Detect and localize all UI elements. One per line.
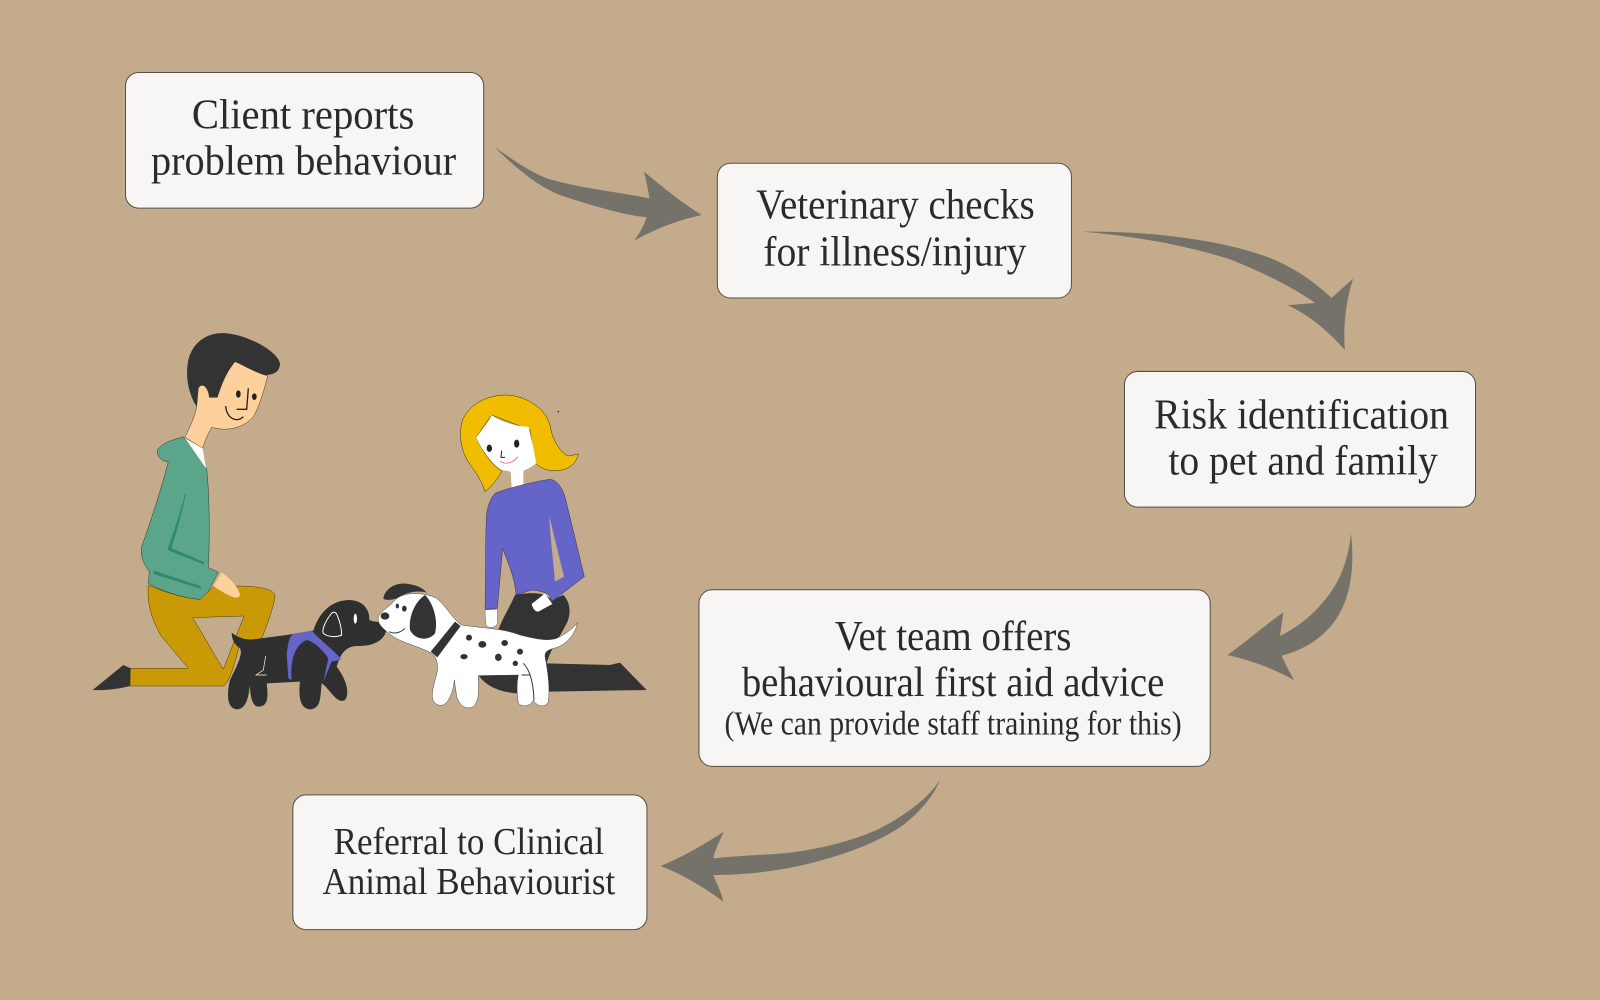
panel: vet team first aid advice: Vet team offers [835,614,1071,660]
black dog with harness [228,600,387,709]
panel: risk identification: to pet and family [1168,438,1438,484]
panel: veterinary checks: Veterinary checks [756,182,1035,228]
panel: referral to clinical animal behaviourist: Animal Behaviourist [322,861,616,903]
panel: risk identification: Risk identification [1154,393,1449,439]
panel: vet team first aid advice: behavioural first aid advice [742,660,1164,706]
panel: risk identification [1124,371,1476,507]
arrow: client report to veterinary checks [494,147,702,241]
panel: client reports problem behaviour [126,72,484,208]
dalmatian dog with collar [378,584,577,708]
arrow: veterinary checks to risk identification [1082,232,1353,350]
panel: client reports problem behaviour: problem behaviour [151,138,456,184]
panel: referral to clinical animal behaviourist [293,795,647,930]
panel: vet team first aid advice: (We can provide staff training for this) [724,706,1182,743]
arrow: first aid advice to referral [661,780,940,902]
panel: vet team first aid advice [699,590,1210,766]
panel: client reports problem behaviour: Client reports [192,93,414,139]
illustration: two people with dogs [93,333,647,709]
arrow: risk identification to first aid advice [1227,533,1352,680]
man kneeling [93,333,280,690]
panel: referral to clinical animal behaviourist: Referral to Clinical [334,821,604,863]
woman sitting [461,395,647,694]
panel: veterinary checks [717,163,1071,298]
panel: veterinary checks: for illness/injury [763,229,1027,275]
